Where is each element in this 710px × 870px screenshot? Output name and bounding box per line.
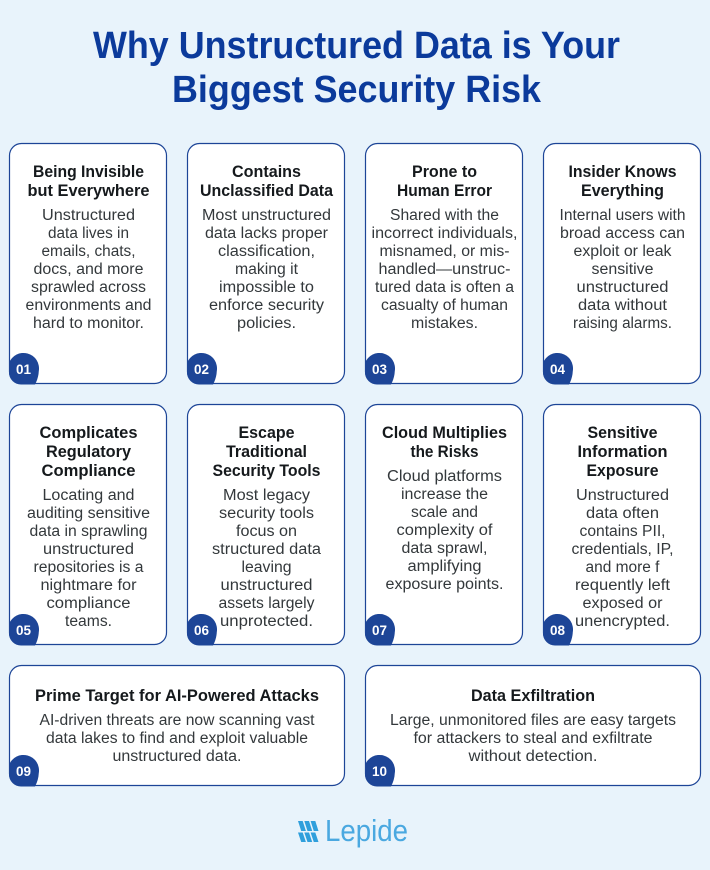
text 04: broad access can <box>560 225 685 242</box>
text 02: Most unstructured <box>202 207 331 224</box>
text 01 <box>26 207 152 332</box>
text 09: AI-driven threats are now scanning vast <box>40 712 315 729</box>
text 06: structured data <box>212 541 321 558</box>
text 07: amplifying <box>408 558 482 575</box>
heading 02: Unclassified Data <box>200 182 334 200</box>
badge 07: 07 <box>372 623 387 638</box>
badge 10: 10 <box>372 764 387 779</box>
heading 01: Being Invisible <box>33 163 144 181</box>
panel: 01 Being Invisible but Everywhere <box>9 144 166 384</box>
text 01: docs, and more <box>34 261 144 278</box>
title: Biggest Security Risk <box>172 69 542 111</box>
heading 05: Regulatory <box>46 443 132 461</box>
heading 01 <box>28 163 150 200</box>
text 06 <box>212 487 321 630</box>
text 05: Locating and <box>42 487 134 504</box>
heading 03: Prone to <box>412 163 477 181</box>
badge 04 <box>543 353 573 384</box>
text 01: sprawled across <box>31 279 146 296</box>
text 05: nightmare for <box>40 577 136 594</box>
heading 10: Data Exfiltration <box>471 687 595 705</box>
heading 06: Security Tools <box>212 462 320 480</box>
text 05: unstructured <box>43 541 134 558</box>
text 08: contains PII, <box>580 523 666 540</box>
text 04: sensitive <box>592 261 654 278</box>
text 01: Unstructured <box>42 207 135 224</box>
heading 04: Insider Knows <box>568 163 676 181</box>
text 02 <box>202 207 331 332</box>
heading 02: Contains <box>232 163 301 181</box>
text 08 <box>572 487 674 630</box>
text 08: requently left <box>575 577 671 594</box>
badge 09 <box>9 755 39 786</box>
panel: 10 Data Exfiltration <box>365 666 700 786</box>
badge 05: 05 <box>16 623 31 638</box>
heading 01: but Everywhere <box>28 182 150 200</box>
text 06: unprotected. <box>220 613 313 630</box>
heading 04 <box>568 163 676 200</box>
text 03: misnamed, or mis- <box>380 243 510 260</box>
panel: 09 Prime Target for AI-Powered Attacks <box>9 666 344 786</box>
text 06: security tools <box>219 505 314 522</box>
text 02: data lacks proper <box>205 225 328 242</box>
text 05 <box>27 487 150 630</box>
heading 06: Traditional <box>226 443 307 461</box>
text 08: and more f <box>586 559 660 576</box>
text 05: data in sprawling <box>30 523 148 540</box>
text 02: enforce security <box>209 297 324 314</box>
text 06: focus on <box>236 523 297 540</box>
text 03: mistakes. <box>411 315 478 332</box>
text 06: assets largely <box>218 595 315 612</box>
text 09: data lakes to find and exploit valuable <box>46 730 308 747</box>
title <box>93 25 620 111</box>
heading 02 <box>200 163 334 200</box>
heading 09: Prime Target for AI-Powered Attacks <box>35 687 319 705</box>
heading 07 <box>382 424 507 461</box>
badge 08: 08 <box>550 623 565 638</box>
text 02: policies. <box>237 315 296 332</box>
badge 02 <box>187 353 217 384</box>
text 03: tured data is often a <box>375 279 514 296</box>
text 04: data without <box>578 297 668 314</box>
text 04 <box>560 207 686 332</box>
badge 06 <box>187 614 217 646</box>
heading 07: Cloud Multiplies <box>382 424 507 442</box>
text 10: without detection. <box>467 748 598 765</box>
text 10 <box>390 712 676 765</box>
badge 10 <box>365 755 395 786</box>
panel: 02 Contains Unclassified Data <box>187 144 344 384</box>
text 08: unencrypted. <box>575 613 670 630</box>
text 05: auditing sensitive <box>27 505 150 522</box>
text 01: environments and <box>26 297 152 314</box>
text 02: impossible to <box>219 279 314 296</box>
text 07: exposure points. <box>386 576 504 593</box>
badge 06: 06 <box>194 623 209 638</box>
text 09 <box>40 712 315 765</box>
heading 03: Human Error <box>397 182 493 200</box>
text 04: Internal users with <box>560 207 686 224</box>
heading 07: the Risks <box>410 443 478 461</box>
text 06: Most legacy <box>223 487 310 504</box>
text 05: compliance <box>46 595 130 612</box>
badge 09: 09 <box>16 764 31 779</box>
text 07: Cloud platforms <box>387 468 502 485</box>
panel: 06 Escape Traditional Security Tools <box>187 404 344 646</box>
wordmark: Lepide <box>325 813 408 848</box>
panel: 03 Prone to Human Error <box>365 144 522 384</box>
text 03: Shared with the <box>390 207 499 224</box>
panel: 04 Insider Knows Everything <box>543 144 700 384</box>
badge 02: 02 <box>194 362 209 377</box>
text 08: credentials, IP, <box>572 541 674 558</box>
badge 03 <box>365 353 395 384</box>
text 01: hard to monitor. <box>33 315 144 332</box>
text 04: unstructured <box>576 279 668 296</box>
badge 05 <box>9 614 39 646</box>
panel: 07 Cloud Multiplies the Risks <box>365 404 522 646</box>
badge 04: 04 <box>550 362 565 377</box>
badge 03: 03 <box>372 362 387 377</box>
text 03: casualty of human <box>381 297 508 314</box>
text 07: increase the <box>401 486 488 503</box>
text 01: data lives in <box>48 225 129 242</box>
text 10: for attackers to steal and exfiltrate <box>414 730 652 747</box>
panel: 05 Complicates Regulatory Compliance <box>9 404 166 646</box>
text 02: making it <box>235 261 299 278</box>
text 05: teams. <box>65 613 112 630</box>
text 08: Unstructured <box>576 487 669 504</box>
text 06: leaving <box>242 559 292 576</box>
badge 01 <box>9 353 39 384</box>
heading 05 <box>40 424 138 480</box>
heading 06: Escape <box>238 424 294 442</box>
heading 04: Everything <box>581 182 664 200</box>
heading 08 <box>578 424 668 480</box>
text 02: classification, <box>218 243 315 260</box>
badge 01: 01 <box>16 362 31 377</box>
text 07: data sprawl, <box>402 540 488 557</box>
text 08: data often <box>586 505 659 522</box>
text 09: unstructured data. <box>112 748 242 765</box>
text 01: emails, chats, <box>42 243 136 260</box>
heading 08: Information <box>578 443 668 461</box>
icon: Lepide mark <box>298 821 318 842</box>
title: Why Unstructured Data is Your <box>93 25 620 67</box>
text 04: exploit or leak <box>574 243 672 260</box>
badge 08 <box>543 614 573 646</box>
text 05: repositories is a <box>34 559 144 576</box>
text 03: handled—unstruc- <box>378 261 510 278</box>
text 07: scale and <box>411 504 478 521</box>
text 03: incorrect individuals, <box>372 225 518 242</box>
heading 03 <box>397 163 493 200</box>
heading 05: Compliance <box>42 462 136 480</box>
text 06: unstructured <box>220 577 312 594</box>
text 07: complexity of <box>396 522 493 539</box>
heading 08: Exposure <box>586 462 658 480</box>
heading 08: Sensitive <box>588 424 658 442</box>
heading 05: Complicates <box>40 424 138 442</box>
badge 07 <box>365 614 395 646</box>
panel: 08 Sensitive Information Exposure <box>543 404 700 646</box>
text 04: raising alarms. <box>573 315 672 332</box>
text 08: exposed or <box>582 595 662 612</box>
text 03 <box>372 207 518 332</box>
text 07 <box>386 468 504 593</box>
text 10: Large, unmonitored files are easy targets <box>390 712 676 729</box>
heading 06 <box>212 424 320 480</box>
logo: Lepide <box>298 813 408 848</box>
